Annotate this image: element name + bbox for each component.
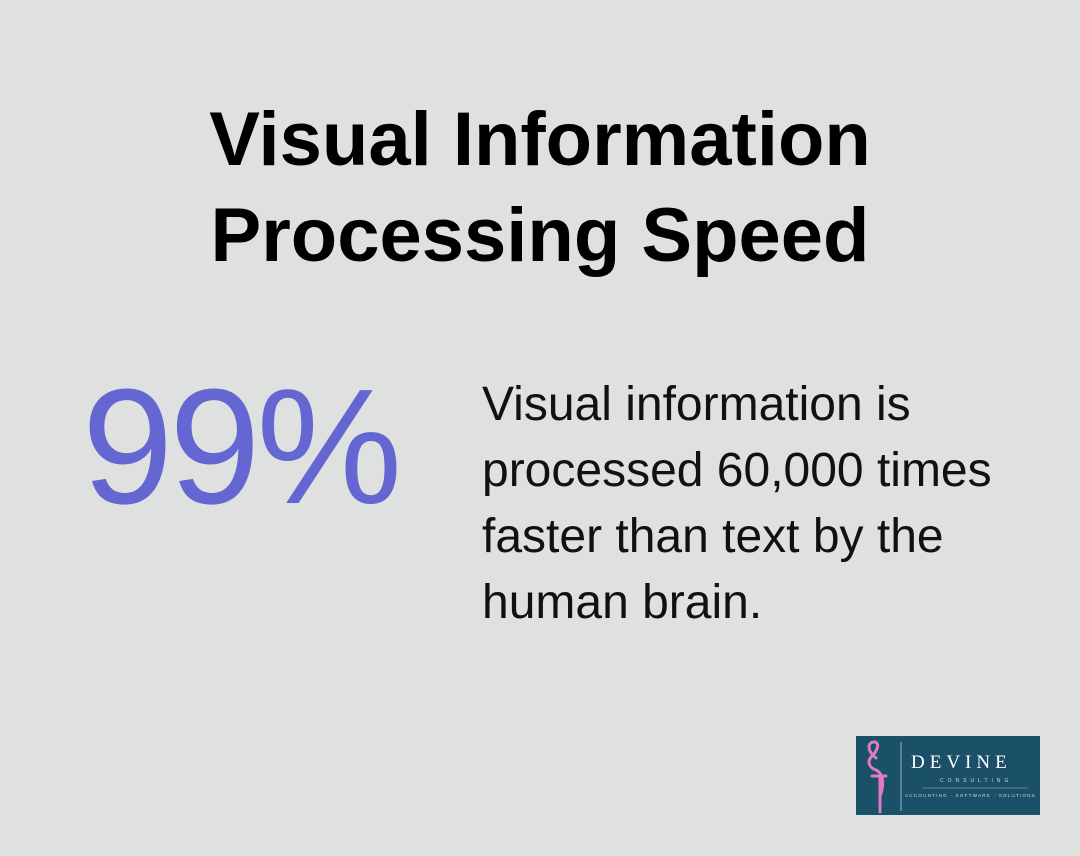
icon: flamingo — [869, 742, 886, 812]
logo: Devine Consulting — [856, 736, 1040, 815]
logo: Devine Consulting: DEVINE — [911, 752, 1012, 773]
text block: description: human brain. — [482, 576, 762, 629]
title — [209, 97, 871, 278]
text block: description: Visual information is — [482, 378, 911, 431]
logo: Devine Consulting: ACCOUNTING · SOFTWARE · SOLUTIONS — [905, 793, 1036, 798]
logo: Devine Consulting: CONSULTING — [940, 778, 1012, 784]
text block: description: faster than text by the — [482, 510, 944, 563]
text block: description — [482, 378, 992, 629]
title: Visual Information — [209, 97, 871, 182]
title: Processing Speed — [211, 193, 869, 278]
text block: description: processed 60,000 times — [482, 444, 992, 497]
stat: 99%: 99% — [82, 355, 398, 538]
